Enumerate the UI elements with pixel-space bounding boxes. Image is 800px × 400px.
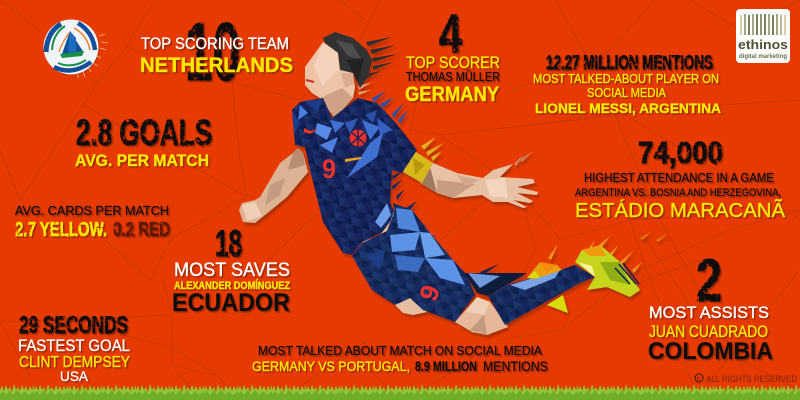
most talked-about player stat: 12.27 MILLION MENTIONS — [546, 53, 713, 74]
match social media stat: 8.9 MILLION — [415, 359, 477, 374]
goals stat — [75, 112, 212, 170]
football icon — [44, 20, 108, 78]
front boot — [575, 245, 640, 297]
cards stat: 2.7 YELLOW. — [15, 219, 107, 241]
top scoring team stat — [140, 34, 293, 77]
match social media stat: MENTIONS — [483, 359, 548, 374]
goals stat: AVG. PER MATCH — [75, 151, 209, 170]
number: 10: 10 — [185, 5, 240, 98]
right arm with hand — [420, 163, 538, 208]
fastest goal stat — [18, 312, 130, 384]
top scorer stat: GERMANY — [405, 83, 499, 106]
fastest goal stat: USA — [60, 368, 89, 384]
top scorer stat: THOMAS MÜLLER — [406, 70, 500, 84]
most assists stat: COLOMBIA — [648, 338, 773, 365]
most saves stat: ALEXANDER DOMÍNGUEZ — [174, 279, 290, 292]
fastest goal stat: FASTEST GOAL — [18, 336, 130, 355]
most assists stat: JUAN CUADRADO — [649, 322, 768, 341]
top scoring team stat: NETHERLANDS — [140, 54, 293, 77]
attendance stat — [575, 135, 786, 222]
armband — [403, 150, 433, 183]
most talked-about player stat: MOST TALKED-ABOUT PLAYER ON — [533, 72, 719, 86]
most assists stat: MOST ASSISTS — [649, 303, 769, 322]
attendance stat: 74,000 — [638, 135, 723, 170]
top scorer stat — [405, 2, 500, 106]
most talked-about player stat: LIONEL MESSI, ARGENTINA — [535, 100, 721, 116]
most saves stat: ECUADOR — [172, 289, 290, 317]
thigh skin — [395, 297, 508, 335]
rear boot — [527, 262, 568, 313]
most saves stat: 18 — [215, 223, 242, 264]
most saves stat: MOST SAVES — [174, 260, 290, 281]
top scorer stat: 4 — [439, 2, 462, 64]
waist skin — [362, 211, 396, 245]
cards stat — [15, 203, 170, 241]
logo: ethinos — [736, 9, 790, 63]
top scorer stat: TOP SCORER — [406, 53, 500, 72]
most assists stat: 2 — [696, 247, 722, 314]
shorts number: 9 — [413, 281, 446, 305]
goals stat: 2.8 GOALS — [76, 112, 212, 153]
hair — [323, 32, 372, 88]
sock — [488, 262, 598, 326]
top scoring team stat: TOP SCORING TEAM — [141, 34, 289, 53]
logo: ethinos: ethinos — [738, 37, 788, 52]
fastest goal stat: 29 SECONDS — [19, 312, 128, 339]
nike mark — [304, 128, 318, 134]
most saves stat — [172, 223, 290, 317]
shorts — [345, 200, 480, 325]
most assists stat — [648, 247, 773, 365]
rear leg — [465, 273, 527, 296]
shirt — [292, 98, 420, 259]
left arm — [239, 148, 308, 223]
crest — [350, 129, 366, 147]
attendance stat: ESTÁDIO MARACANÃ — [575, 198, 786, 222]
cards stat: 0.2 RED — [113, 219, 170, 241]
match social media stat: MOST TALKED ABOUT MATCH ON SOCIAL MEDIA — [258, 344, 543, 358]
shirt number: 9 — [322, 154, 336, 184]
player illustration — [239, 32, 668, 335]
copyright: c — [697, 376, 700, 382]
grass — [0, 384, 800, 400]
attendance stat: HIGHEST ATTENDANCE IN A GAME — [584, 171, 774, 185]
match social media stat — [252, 344, 548, 374]
match social media stat: GERMANY VS PORTUGAL, — [252, 359, 410, 374]
cards stat: AVG. CARDS PER MATCH — [15, 203, 169, 218]
logo: ethinos: digital marketing — [739, 53, 787, 60]
most talked-about player stat: SOCIAL MEDIA — [587, 86, 667, 100]
motion streaks — [358, 37, 668, 275]
most talked-about player stat — [533, 53, 721, 116]
fastest goal stat: CLINT DEMPSEY — [19, 354, 130, 371]
head — [305, 42, 355, 118]
